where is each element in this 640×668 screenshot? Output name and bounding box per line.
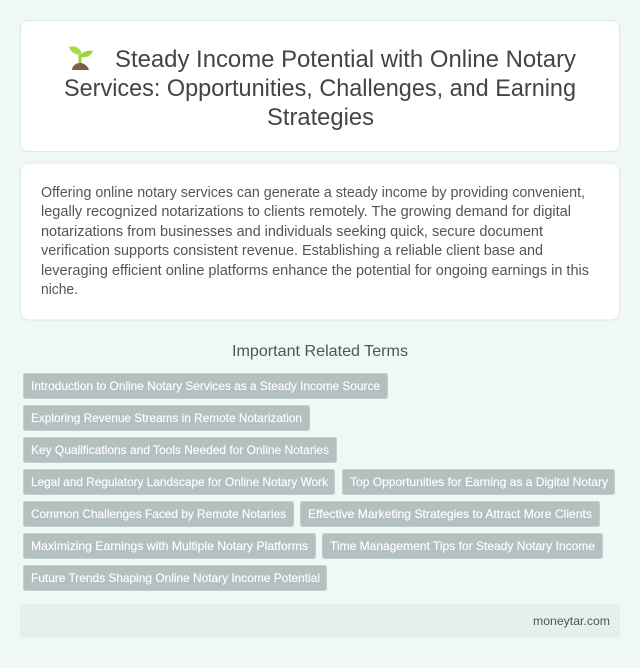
title: Steady Income Potential with Online Notary [115,46,576,73]
tag 6 [24,502,294,526]
text block: description: legally recognized notarizations to clients remotely. The growing demand for digital [41,204,571,220]
tag 3: Key Qualifications and Tools Needed for Online Notaries [31,443,329,457]
title: Services: Opportunities, Challenges, and Earning [64,75,576,102]
tags: related terms [24,374,614,590]
panel: title card [20,20,620,152]
tag 8 [24,534,316,558]
text block: description [41,185,589,298]
footer [20,604,620,638]
text block: description: notarizations from businesses and individuals seeking quick, secure document [41,224,543,240]
title: Strategies [267,104,374,131]
tag 9: Time Management Tips for Steady Notary Income [330,539,595,553]
title [64,46,576,131]
tag 8: Maximizing Earnings with Multiple Notary Platforms [31,539,308,553]
panel: description [20,163,620,320]
icon: seedling [69,46,93,70]
footer source: moneytar.com [533,614,610,628]
tag 4: Legal and Regulatory Landscape for Online Notary Work [31,475,329,489]
tag 1 [24,374,388,398]
tag 3 [24,438,336,462]
tag 4 [24,470,334,494]
tag 1: Introduction to Online Notary Services as a Steady Income Source [31,379,380,393]
tag 5: Top Opportunities for Earning as a Digital Notary [350,475,608,489]
tag 2: Exploring Revenue Streams in Remote Notarization [31,411,302,425]
tag 2 [24,406,310,430]
tag 9 [322,534,602,558]
text block: description: verification supports consistent revenue. Establishing a reliable client base and [41,243,543,259]
tag 6: Common Challenges Faced by Remote Notaries [31,507,286,521]
text block: description: niche. [41,282,78,298]
tag 7: Effective Marketing Strategies to Attract More Clients [308,507,592,521]
tag 5 [342,470,614,494]
heading: related terms: Important Related Terms [232,343,408,360]
text block: description: leveraging efficient online platforms enhance the potential for ongoing earnings in this [41,263,589,279]
tag 10: Future Trends Shaping Online Notary Income Potential [31,571,320,585]
tag 10 [24,566,326,590]
tag 7 [300,502,600,526]
text block: description: Offering online notary services can generate a steady income by providing convenient, [41,185,585,201]
